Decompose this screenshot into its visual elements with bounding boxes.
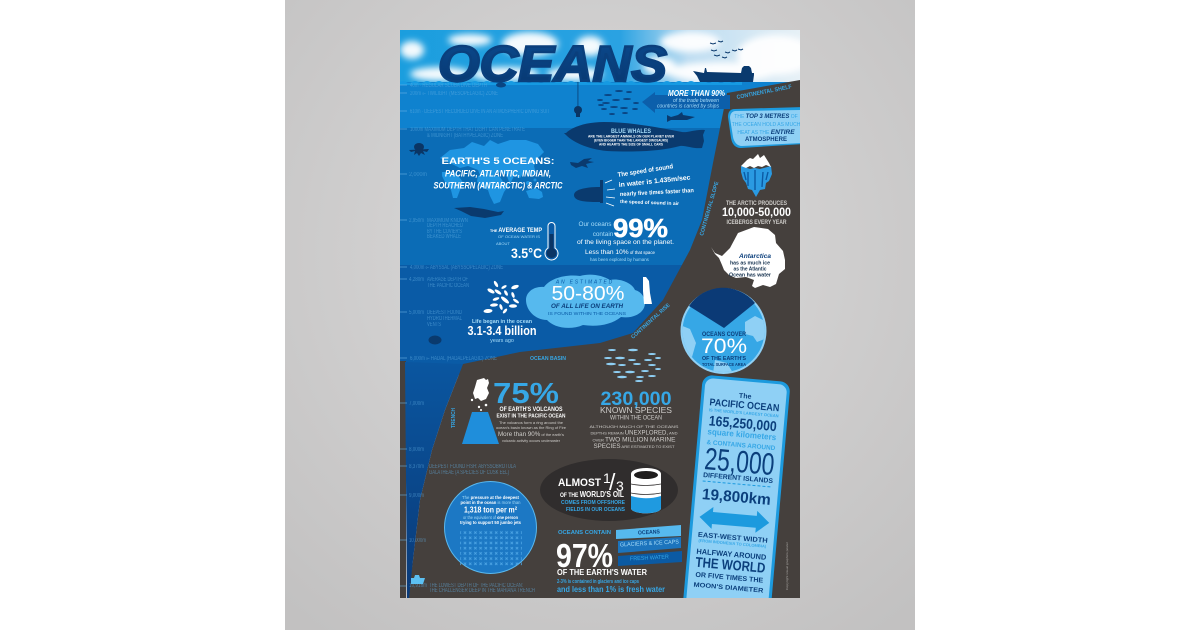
- callout: top 3 metres: ATMOSPHERE: [745, 136, 788, 143]
- depth scale labels: 2,000m: [409, 172, 427, 178]
- panel: globe 70%: [680, 288, 767, 374]
- callout: top 3 metres: THE OCEAN HOLD AS MUCH: [732, 122, 801, 128]
- panel: oil: FIELDS IN OUR OCEANS: [566, 507, 625, 513]
- depth scale labels: THE PACIFIC OCEAN: [427, 283, 469, 289]
- panel: Antarctica: as the Atlantic: [734, 266, 767, 272]
- panel: globe 70%: 70%: [701, 335, 747, 358]
- panel: 97% water: 2-3% is contained in glaciers and ice caps: [557, 579, 639, 585]
- depth scale labels: 2,950m: [409, 218, 424, 224]
- depth scale labels: 4,000m ⟜ ABYSSAL (ABYSSOPELAGIC) ZONE: [410, 265, 503, 271]
- icon: sperm whale: [574, 187, 600, 202]
- panel: Pacific Ocean: [682, 375, 791, 621]
- text: our oceans contain 99%: has been explored by humans: [590, 257, 650, 262]
- heading: Earth's 5 oceans: EARTH'S 5 OCEANS:: [442, 156, 554, 167]
- panel: seabed and continental land: [408, 80, 800, 598]
- depth scale labels: 7,000m: [409, 401, 424, 407]
- text: life began: Life began in the ocean: [472, 319, 533, 325]
- depth scale labels: 5,000m: [409, 310, 424, 316]
- text: our oceans contain 99%: 99%: [613, 213, 668, 243]
- text: life began: 3.1-3.4 billion: [468, 324, 536, 338]
- depth scale labels: DEPTH REACHED: [427, 223, 463, 229]
- panel: Antarctica: has as much ice: [730, 260, 770, 266]
- title: OCEANS: [438, 36, 667, 92]
- depth scale labels: 10,916m: [409, 583, 427, 589]
- label: continental shelf: CONTINENTAL SHELF: [736, 84, 793, 101]
- text: 75% volcanoes: The volcanos form a ring around the: [499, 421, 563, 425]
- text: our oceans contain 99%: Our oceans: [578, 221, 612, 228]
- text: speed of sound: nearly five times faster than: [620, 188, 694, 198]
- text: 75% volcanoes: volcanic activity occurs underwater: [502, 439, 561, 443]
- panel: cloud 50-80%: 50-80%: [552, 283, 625, 305]
- panel: ocean water layers: [400, 81, 800, 375]
- panel: oil: [540, 459, 678, 521]
- panel: Antarctica: Ocean has water: [729, 272, 771, 278]
- panel: cloud 50-80%: [526, 275, 645, 328]
- heading: Earth's 5 oceans: SOUTHERN (ANTARCTIC) & ARCTIC: [434, 180, 563, 192]
- callout: top 3 metres: THE TOP 3 METRES OF: [734, 114, 798, 120]
- background panel: [285, 0, 915, 630]
- left seabed: [400, 361, 406, 598]
- depth scale labels: AVERAGE DEPTH OF: [427, 277, 468, 283]
- panel: Pacific Ocean: DIFFERENT ISLANDS: [703, 472, 774, 485]
- text: average temperature: OF OCEAN WATER IS: [498, 234, 540, 239]
- text: speed of sound: [617, 163, 694, 207]
- world map: [440, 140, 544, 204]
- panel: oil: ALMOST: [558, 477, 601, 489]
- text: our oceans contain 99%: contain: [593, 231, 614, 238]
- panel: Antarctica: Antarctica: [738, 253, 771, 260]
- icon: birds: [710, 41, 743, 58]
- depth scale labels: MAXIMUM KNOWN: [427, 218, 468, 224]
- icon: submarine in trench: [411, 575, 425, 584]
- icon: thermometer: [545, 223, 558, 260]
- panel: cloud 50-80%: AN ESTIMATED: [555, 280, 614, 286]
- depth scale labels: VENTS: [427, 322, 441, 328]
- text: 75% volcanoes: 75%: [493, 378, 559, 410]
- icon: white statue silhouette: [643, 277, 652, 304]
- icon: microbes: [483, 280, 520, 314]
- heading: Earth's 5 oceans: PACIFIC, ATLANTIC, INDIAN,: [445, 168, 551, 180]
- panel: blue whale: ARE THE LARGEST ANIMALS ON OUR PLANET EVER: [588, 134, 674, 138]
- trench: [405, 362, 463, 598]
- panel: Antarctica: [711, 227, 785, 288]
- panel: globe 70%: TOTAL SURFACE AREA: [702, 362, 747, 367]
- text: 230,000 species: WITHIN THE OCEAN: [610, 416, 662, 422]
- panel: Pacific Ocean: 25,000: [703, 441, 776, 482]
- depth scale labels: [400, 83, 550, 594]
- icon: shark: [667, 112, 695, 122]
- callout: top 3 metres: [728, 107, 803, 148]
- callout: more than 90% of trade: MORE THAN 90%: [668, 89, 725, 98]
- depth scale labels: 8,000m: [409, 447, 424, 453]
- text: life began: years ago: [490, 338, 514, 344]
- panel: pressure circle: [444, 482, 536, 574]
- depth scale labels: THE LOWEST DEPTH OF THE PACIFIC OCEAN:: [429, 583, 523, 589]
- panel: Pacific Ocean: The: [739, 393, 752, 401]
- poster: [400, 30, 813, 621]
- panel: oil: COMES FROM OFFSHORE: [561, 500, 625, 506]
- text: 230,000 species: OVER TWO MILLION MARINE: [592, 436, 676, 444]
- text: speed of sound: in water is 1.435m/sec: [618, 174, 691, 189]
- panel: cloud 50-80%: OF ALL LIFE ON EARTH: [551, 304, 624, 310]
- panel: cloud 50-80%: IS FOUND WITHIN THE OCEANS: [548, 311, 626, 316]
- depth scale labels: BY THE CUVIER'S: [427, 229, 462, 235]
- icon: beaked whale: [454, 207, 504, 218]
- text: average temperature: THE AVERAGE TEMP: [490, 228, 542, 234]
- bar chart: water distribution: GLACIERS & ICE CAPS: [620, 539, 679, 548]
- label: trench: TRENCH: [451, 408, 457, 428]
- panel: Pacific Ocean: EAST-WEST WIDTH: [698, 532, 768, 545]
- panel: blue whale: BLUE WHALES: [611, 128, 652, 135]
- panel: 97% water: and less than 1% is fresh water: [557, 585, 665, 594]
- callout: more than 90% of trade: countries is carried by ships: [657, 104, 719, 110]
- text: 230,000 species: DEPTHS REMAIN UNEXPLORED, AND: [590, 430, 678, 436]
- text: 75% volcanoes: OF EARTH'S VOLCANOS: [500, 407, 562, 413]
- panel: sky with clouds: [400, 30, 813, 84]
- panel: oil: /: [609, 469, 616, 495]
- panel: pressure circle: The pressure at the deepest: [462, 495, 520, 500]
- icon: turtle at surface: [496, 82, 506, 88]
- icon: oil barrel: [631, 468, 661, 513]
- label: ocean basin: OCEAN BASIN: [530, 356, 566, 362]
- text: life began: [468, 319, 536, 344]
- icon: cargo ship: [693, 66, 754, 82]
- panel: Pacific Ocean: PACIFIC OCEAN: [709, 397, 780, 414]
- depth scale labels: 9,000m: [409, 493, 424, 499]
- text: 75% volcanoes: [493, 378, 566, 443]
- depth scale labels: 4,280m: [409, 277, 424, 283]
- icon: school of light fish: [604, 349, 661, 382]
- icon: diving bell: [574, 82, 582, 117]
- panel: Pacific Ocean: square kilometers: [707, 426, 777, 442]
- panel: Pacific Ocean: & CONTAINS AROUND: [706, 439, 776, 452]
- text: average temperature: [490, 228, 542, 261]
- text: 75% volcanoes: More than 90% of the earth's: [498, 432, 564, 438]
- depth scale labels: 10,000m: [409, 538, 426, 544]
- icon: sound megaphone: [600, 180, 615, 206]
- text: average temperature: 3.5°C: [511, 245, 542, 261]
- text: 75% volcanoes: ocean's basin known as the Ring of Fire: [496, 426, 566, 430]
- text: average temperature: ABOUT: [496, 241, 510, 246]
- text: 230,000 species: SPECIES ARE ESTIMATED TO EXIST: [594, 444, 675, 450]
- depth scale labels: & MIDNIGHT (BATHYPELAGIC) ZONE: [427, 133, 503, 139]
- text: arctic icebergs: ICEBERGS EVERY YEAR: [726, 220, 787, 226]
- panel: blue whale: (EVEN BIGGER THAN THE LARGEST DINOSAURS): [594, 138, 669, 142]
- depth scale labels: GALATHEAE (A SPECIES OF CUSK EEL): [429, 470, 509, 476]
- bar chart: water distribution: OCEANS: [638, 529, 660, 536]
- panel: 97% water: OF THE EARTH'S WATER: [557, 568, 647, 577]
- icon: squid and diver: [570, 158, 594, 168]
- icon: octopus: [409, 143, 429, 156]
- bar chart: water distribution: FRESH WATER: [630, 554, 669, 562]
- depth scale labels: 40m · REGULAR SCUBA DIVE DEPTH: [410, 83, 487, 89]
- depth scale labels: 1000m MAXIMUM DEPTH THAT LIGHT CAN PENETRATE: [410, 127, 525, 133]
- text: speed of sound: The speed of sound: [617, 163, 674, 179]
- label: continental rise: CONTINENTAL RISE: [630, 302, 672, 340]
- panel: globe 70%: OCEANS COVER: [702, 331, 746, 338]
- panel: Pacific Ocean: MOON'S DIAMETER: [693, 582, 764, 595]
- depth scale labels: DEEPEST FOUND: [427, 310, 462, 316]
- icon: school of fish: [597, 90, 639, 115]
- credit line: Copyright visual graphics poster: [785, 542, 789, 590]
- panel: Pacific Ocean: (FROM INDONESIA TO COLOMBIA): [698, 538, 767, 549]
- panel: blue whale: AND HEARTS THE SIZE OF SMALL CARS: [599, 142, 663, 146]
- panel: pressure circle: or the equivalent of one person: [463, 515, 518, 520]
- panel: pressure circle: 1,318 ton per m²: [464, 506, 517, 514]
- depth scale labels: DEEPEST FOUND FISH: ABYSSOBROTULA: [429, 464, 516, 470]
- panel: 97% water: [556, 530, 665, 594]
- depth scale labels: 610m · DEEPEST RECORDED DIVE IN AN ATMOSPHERIC DIVING SUIT: [410, 109, 550, 115]
- text: arctic icebergs: [722, 201, 791, 226]
- text: 230,000 species: KNOWN SPECIES: [600, 405, 672, 415]
- icon: fish near vents: [428, 336, 442, 344]
- callout: more than 90% of trade: of the trade between: [673, 98, 719, 104]
- panel: Pacific Ocean: THE WORLD: [695, 554, 766, 576]
- panel: Pacific Ocean: 19,800km: [701, 486, 771, 509]
- panel: Pacific Ocean: OR FIVE TIMES THE: [695, 572, 764, 585]
- heading: Earth's 5 oceans: [434, 156, 563, 192]
- panel: pressure circle: point in the ocean is more than: [460, 500, 521, 505]
- text: our oceans contain 99%: [577, 218, 674, 262]
- panel: Pacific Ocean: HALFWAY AROUND: [696, 547, 767, 562]
- callout: top 3 metres: HEAT AS THE ENTIRE: [737, 129, 795, 136]
- panel: Pacific Ocean: 165,250,000: [708, 412, 778, 434]
- panel: pressure circle: trying to support 50 jumbo jets: [460, 520, 522, 525]
- text: our oceans contain 99%: Less than 10% of that space: [585, 249, 656, 256]
- panel: oil: OF THE WORLD'S OIL: [560, 490, 624, 499]
- text: 230,000 species: ALTHOUGH MUCH OF THE OCEANS: [590, 424, 679, 429]
- depth scale labels: 8,370m: [409, 464, 424, 470]
- text: 230,000 species: [590, 389, 679, 450]
- text: arctic icebergs: 10,000-50,000: [722, 207, 791, 219]
- text: arctic icebergs: THE ARCTIC PRODUCES: [726, 201, 787, 207]
- text: 230,000 species: 230,000: [600, 389, 672, 410]
- depth scale labels: BEAKED WHALE: [427, 234, 461, 240]
- depth scale labels: HYDROTHERMAL: [427, 316, 462, 322]
- panel: globe 70%: OF THE EARTH'S: [702, 356, 746, 362]
- icon: iceberg: [741, 154, 772, 197]
- panel: 97% water: 97%: [556, 537, 613, 574]
- label: continental slope: CONTINENTAL SLOPE: [699, 181, 720, 237]
- panel: oil: 3: [616, 478, 624, 494]
- callout: more than 90% of trade: [642, 89, 730, 113]
- text: speed of sound: the speed of sound in air: [620, 199, 679, 207]
- icon: volcano: [462, 378, 499, 444]
- panel: blue whale: [564, 122, 705, 151]
- text: our oceans contain 99%: of the living space on the planet.: [577, 240, 674, 246]
- panel: Pacific Ocean: IS THE WORLD'S LARGEST OCEAN: [709, 407, 779, 418]
- text: 75% volcanoes: EXIST IN THE PACIFIC OCEAN: [496, 414, 566, 420]
- bar chart: water distribution: [616, 525, 682, 566]
- panel: oil: 1: [603, 470, 611, 486]
- depth scale labels: THE CHALLENGER DEEP IN THE MARIANA TRENCH: [429, 588, 535, 594]
- icon: double arrow: [699, 506, 770, 534]
- depth scale labels: 6,000m ⟜ HADAL (HADALPELAGIC) ZONE: [410, 356, 497, 362]
- depth scale labels: 200m ⟜ TWILIGHT (MESOPELAGIC) ZONE: [410, 91, 498, 97]
- panel: 97% water: OCEANS CONTAIN: [558, 530, 611, 536]
